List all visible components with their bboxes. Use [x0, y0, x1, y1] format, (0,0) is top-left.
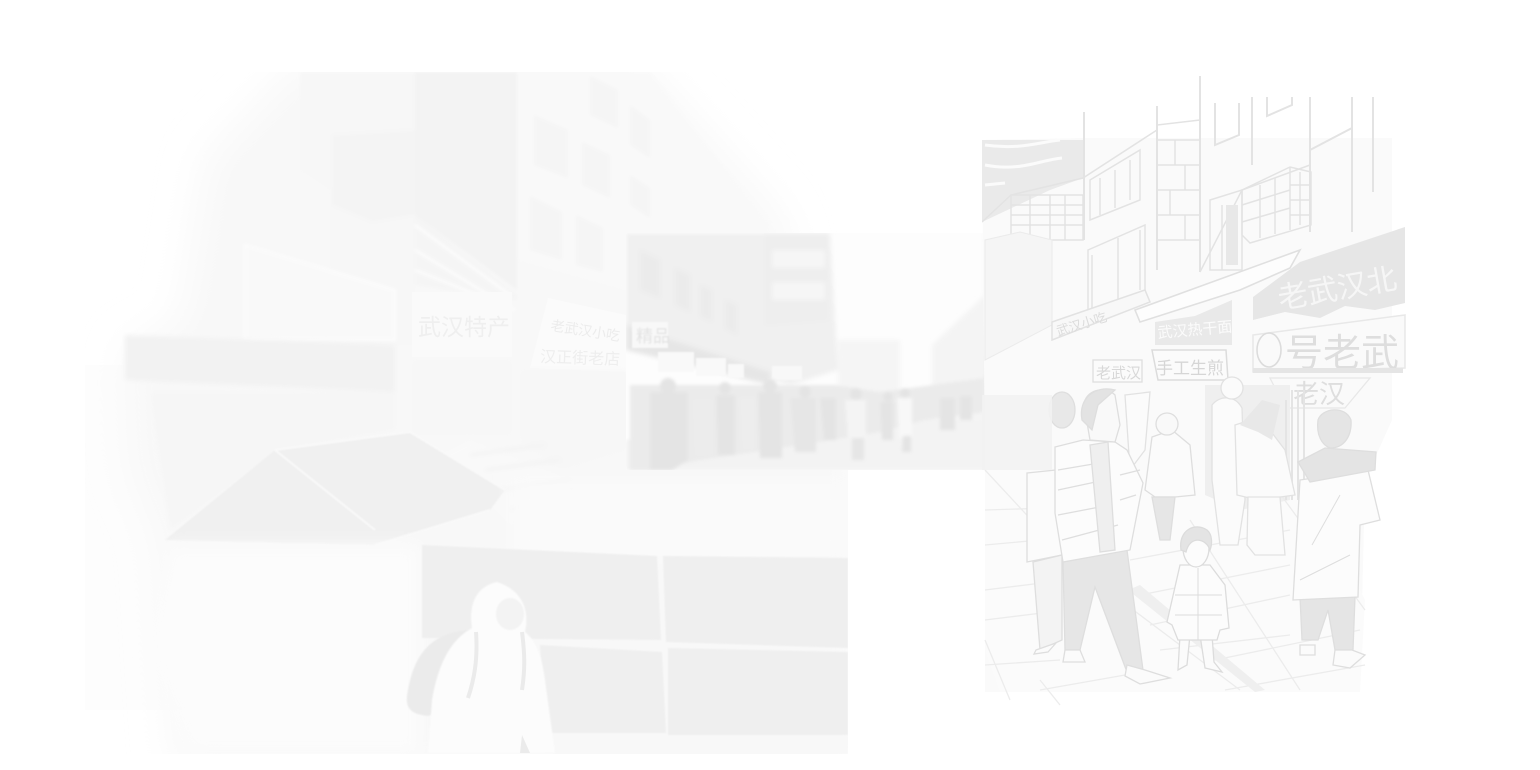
dark sky with streaks: [982, 140, 1083, 222]
shoes: [1300, 645, 1365, 668]
left distant buildings: [985, 232, 1052, 360]
lower hanging sign: 老汉: [1293, 379, 1345, 409]
dark awning with lettering: 老武汉北: [1275, 263, 1399, 316]
right buildings: [936, 302, 982, 382]
photo overlap patch on illustration: [982, 395, 1052, 470]
panel: central street photograph: [626, 233, 984, 470]
left shop sign band: 武汉小吃: [1054, 309, 1109, 339]
sign: local specialty: 武汉特产: [418, 314, 510, 340]
lower hanging sign: [1270, 378, 1370, 409]
sign: slanted shop board: [542, 320, 620, 366]
crowd of pedestrians: [630, 378, 985, 470]
sign: slanted shop board: 汉正街老店: [540, 348, 620, 369]
tent roof: [170, 454, 498, 538]
small shop sign: 老武汉: [1096, 365, 1141, 382]
pale pavement: [985, 470, 1365, 692]
photo base: [626, 233, 1052, 470]
pan-fried bun sign: 手工生煎: [1156, 359, 1224, 378]
sign: slanted shop board: 老武汉小吃: [550, 317, 621, 344]
ground: [628, 421, 982, 468]
left buildings: [626, 233, 838, 385]
backpack: [407, 638, 457, 716]
figure: woman at left with umbrella: [1027, 392, 1075, 654]
shop interior: [1205, 385, 1290, 510]
protective suit: [431, 582, 552, 733]
shop awnings: [626, 330, 769, 383]
figure in protective suit with backpack: [407, 582, 555, 753]
upper building facade: [245, 72, 770, 345]
pan-fried bun sign: [1152, 350, 1228, 380]
white awning: [1135, 250, 1300, 322]
dark awning with lettering: [1253, 227, 1405, 320]
trousers: [1063, 550, 1143, 672]
figure: man in striped puffer jacket: [1055, 389, 1170, 684]
hair: [1318, 410, 1351, 448]
projecting sign box: [1242, 167, 1311, 243]
large store sign: [1253, 315, 1405, 375]
face mask: [497, 599, 523, 629]
trousers: [1300, 597, 1355, 650]
illustration background wash: [984, 236, 1051, 395]
shop sign row: [632, 324, 774, 378]
infographic: faded street illustrations: [124, 72, 1406, 753]
man in striped coat background: [1212, 398, 1245, 545]
pavement tile lines: [985, 470, 1365, 705]
hot dry noodle sign: 武汉热干面: [1157, 319, 1233, 342]
panel: left painted street scene: [124, 72, 848, 753]
diagonal kerb: [1128, 585, 1265, 692]
background crowd: [1125, 377, 1295, 555]
window figure: [1226, 205, 1238, 265]
figure: child in coat: [1167, 527, 1229, 672]
scarf: [1090, 442, 1115, 552]
shoes: [1125, 665, 1170, 684]
backpack straps: [468, 632, 524, 698]
large store sign: 号老武: [1285, 333, 1399, 375]
fur collar: [1298, 448, 1376, 482]
jacket: [1055, 440, 1143, 562]
lower wall wash: [150, 545, 420, 753]
hot dry noodle sign: [1155, 300, 1233, 345]
far gate: [838, 340, 900, 395]
painted background wash: [125, 60, 860, 770]
doorway hatching: [1286, 390, 1304, 500]
faint left margin wash: [85, 365, 185, 710]
figure: man walking in centre: [1145, 413, 1195, 540]
head: [1084, 390, 1120, 442]
panel: right line-drawn street illustration: [982, 76, 1405, 705]
buildings outline: [982, 76, 1373, 315]
left shop sign band: [1052, 290, 1150, 340]
pale ground strip: [510, 480, 850, 560]
air conditioner box: [332, 130, 415, 222]
long coat: [1293, 470, 1380, 600]
lower storefronts and steps: [127, 336, 161, 376]
figure: woman in long coat with fur collar: [1293, 410, 1380, 668]
barrier panels: [422, 546, 848, 734]
woman hair and scarf: [1240, 400, 1280, 440]
shop sign row: 精品: [636, 327, 670, 346]
